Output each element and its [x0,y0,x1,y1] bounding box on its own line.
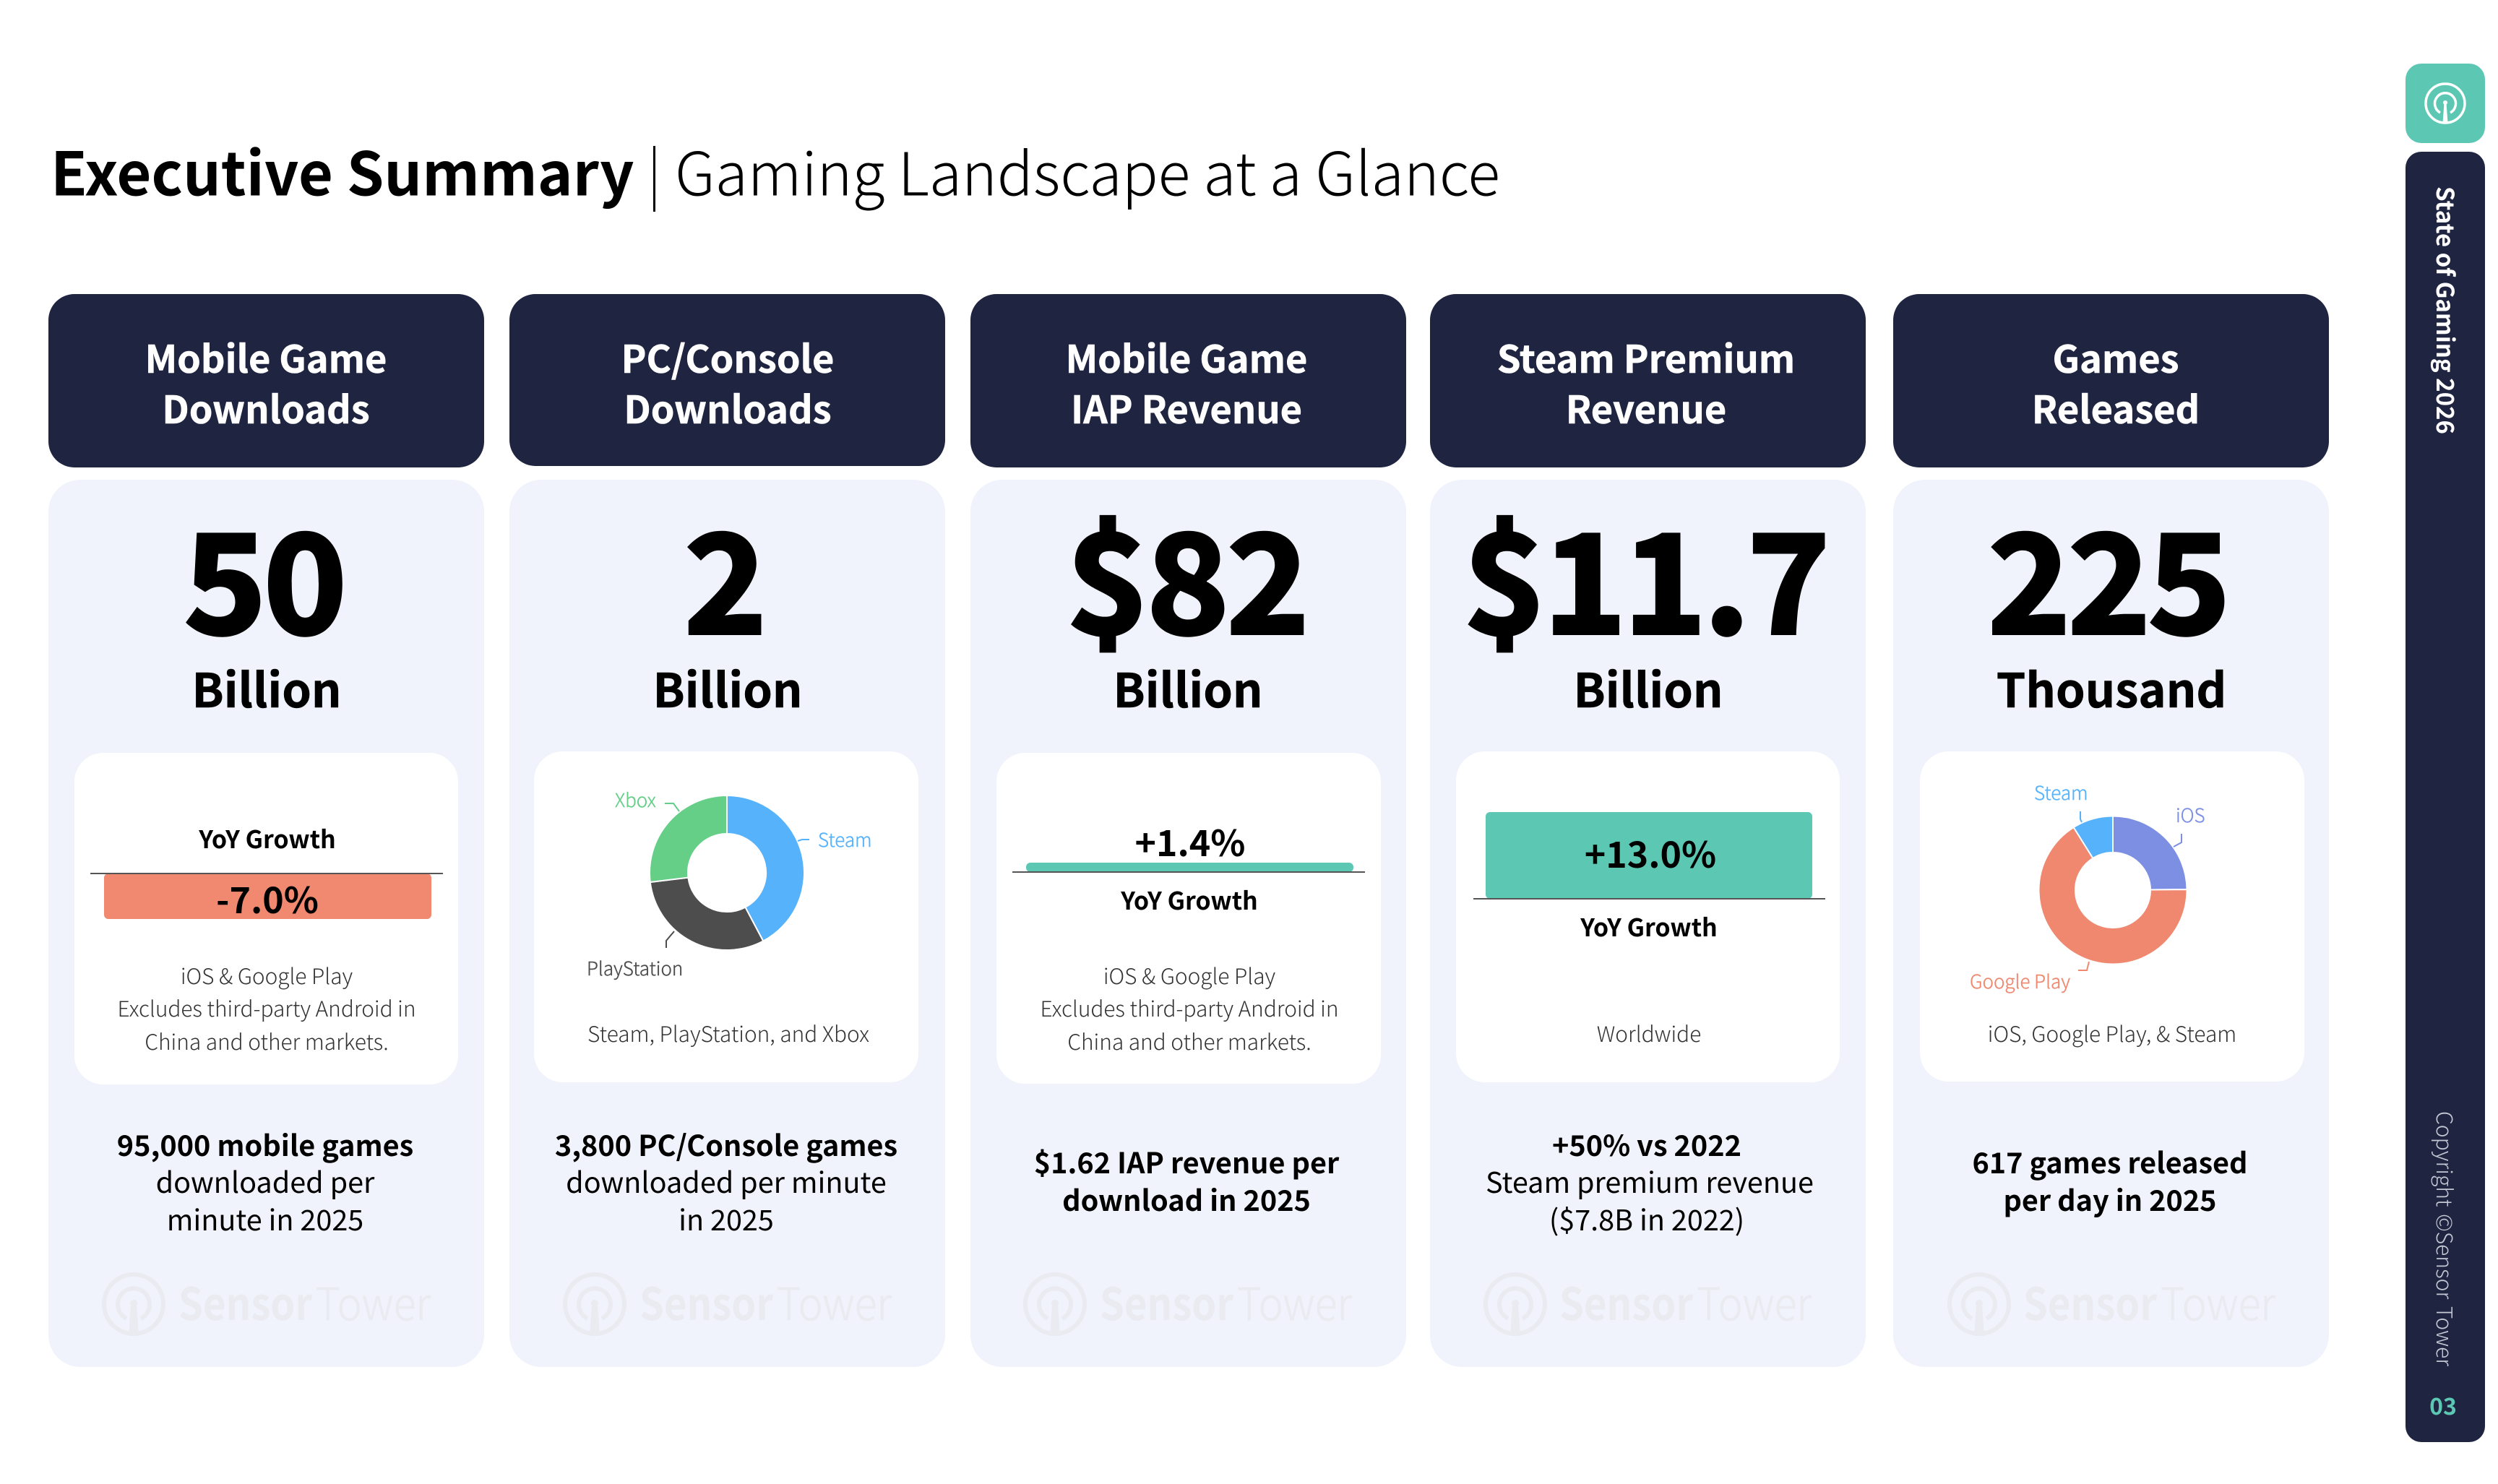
big number: $11.7 billion: $11.7 [1462,473,1826,676]
header: steam premium revenue: Revenue [1566,380,1726,435]
chart note: iOS & Google Play [1103,959,1276,991]
bar chart: yoy +1.4% [1012,815,1365,917]
chart note: iOS, Google Play, & Steam [1988,1017,2236,1048]
donut chart: store share: Google Play [1970,967,2070,994]
header: games released [1893,294,2329,467]
bar chart: yoy +13.0% [1473,812,1825,944]
header: pc/console downloads [509,294,945,466]
watermark: Tower [777,1268,892,1333]
page number: 03 [2429,1389,2457,1422]
header: mobile game iap revenue: IAP Revenue [1071,380,1302,435]
icon: sensor tower logo tile [2406,64,2485,143]
title: Executive Summary [51,126,634,212]
chart note: China and other markets. [1067,1024,1312,1056]
chart note: China and other markets. [145,1024,389,1056]
key stat: per day in 2025 [2003,1178,2217,1220]
watermark: Tower [1697,1268,1812,1333]
watermark [104,1268,431,1336]
watermark [1486,1268,1812,1336]
header: pc/console downloads: PC/Console [621,329,834,384]
big number: 2 billion: 2 [683,473,762,676]
bar chart: yoy +1.4%: +1.4% [1135,815,1245,867]
watermark: Sensor [1559,1268,1694,1333]
watermark: Tower [2161,1268,2276,1333]
big number: 225 thousand: Thousand [1997,653,2226,721]
header: pc/console downloads: Downloads [624,380,832,435]
header: games released: Games [2052,329,2179,384]
white chart card [996,753,1381,1084]
chart note: Excludes third-party Android in [1041,991,1338,1023]
big number: 225 thousand: 225 [1986,473,2226,676]
chart note: Excludes third-party Android in [118,991,415,1023]
key stat: +50% vs 2022 [1552,1123,1741,1165]
big number: 2 billion [653,473,803,721]
bar chart: yoy +13.0%: YoY Growth [1580,908,1718,944]
donut chart: store share: iOS [2176,801,2205,828]
donut chart: platform share [587,786,872,981]
key stat: $1.62 IAP revenue per [1034,1141,1340,1182]
panel: mobile game downloads [48,294,484,1367]
donut chart: store share [1970,779,2205,994]
bar chart: yoy -7.0% [90,820,443,924]
copyright: Copyright ©Sensor Tower [2430,1111,2462,1366]
chart note [1041,959,1338,1056]
chart note: iOS & Google Play [181,959,353,991]
key stat: minute in 2025 [167,1198,363,1239]
panel: games released [1893,294,2329,1367]
key stat [1034,1141,1340,1220]
white chart card [1456,751,1840,1082]
watermark: Sensor [639,1268,774,1333]
header: mobile game downloads: Mobile Game [145,329,387,384]
donut chart: store share: Steam [2034,779,2088,806]
key stat: ($7.8B in 2022) [1549,1198,1744,1239]
watermark: Tower [1237,1268,1353,1333]
panel: pc/console downloads [509,294,945,1367]
sidebar [2406,152,2485,1442]
big number: 2 billion: Billion [653,653,803,721]
sidebar title: State of Gaming 2026 [2429,186,2464,434]
key stat [555,1123,897,1239]
donut chart: platform share: Xbox [615,786,656,813]
header: mobile game downloads: Downloads [162,380,370,435]
white chart card [1920,751,2304,1082]
watermark [1025,1268,1353,1336]
chart note: Steam, PlayStation, and Xbox [587,1017,869,1048]
key stat [1486,1123,1814,1239]
bar chart: yoy -7.0%: YoY Growth [198,820,336,855]
title [51,126,1500,212]
big number: $82 billion: $82 [1065,473,1305,676]
donut chart: platform share: PlayStation [587,954,683,981]
card body [1430,480,1866,1367]
header: steam premium revenue [1430,294,1866,467]
chart note: Worldwide [1597,1017,1701,1048]
panel: mobile game iap revenue [970,294,1406,1367]
key stat [117,1123,413,1239]
bar chart: yoy -7.0%: -7.0% [216,872,319,924]
card body [1893,480,2329,1367]
key stat: downloaded per [156,1160,375,1202]
header: steam premium revenue: Steam Premium [1497,329,1795,384]
watermark [1950,1268,2276,1336]
bar chart: yoy +1.4%: YoY Growth [1120,881,1258,917]
big number: $11.7 billion: Billion [1573,653,1723,721]
header: games released: Released [2032,380,2200,435]
key stat: download in 2025 [1062,1178,1311,1220]
watermark: Sensor [1100,1268,1234,1333]
header: mobile game iap revenue: Mobile Game [1066,329,1307,384]
key stat: 617 games released [1972,1141,2248,1182]
bar chart: yoy +13.0%: +13.0% [1585,827,1716,879]
white chart card [534,751,918,1082]
header: mobile game downloads [48,294,484,467]
panel: steam premium revenue [1430,294,1866,1367]
big number: $82 billion: Billion [1113,653,1263,721]
big number: 50 billion: 50 [182,473,343,676]
key stat: 3,800 PC/Console games [555,1123,897,1165]
key stat: downloaded per minute [566,1160,887,1202]
card body [48,480,484,1367]
watermark: Sensor [178,1268,313,1333]
key stat: Steam premium revenue [1486,1160,1814,1202]
watermark: Tower [316,1268,431,1333]
card body [509,480,945,1367]
chart note [118,959,415,1056]
watermark: Sensor [2023,1268,2158,1333]
card body [970,480,1406,1367]
key stat: 95,000 mobile games [117,1123,413,1165]
white chart card [74,753,458,1084]
key stat: in 2025 [679,1198,774,1239]
watermark [565,1268,892,1336]
header: mobile game iap revenue [970,294,1406,467]
key stat [1972,1141,2248,1220]
big number: 50 billion: Billion [191,653,342,721]
donut chart: platform share: Steam [818,826,872,853]
title: Gaming Landscape at a Glance [675,126,1500,212]
